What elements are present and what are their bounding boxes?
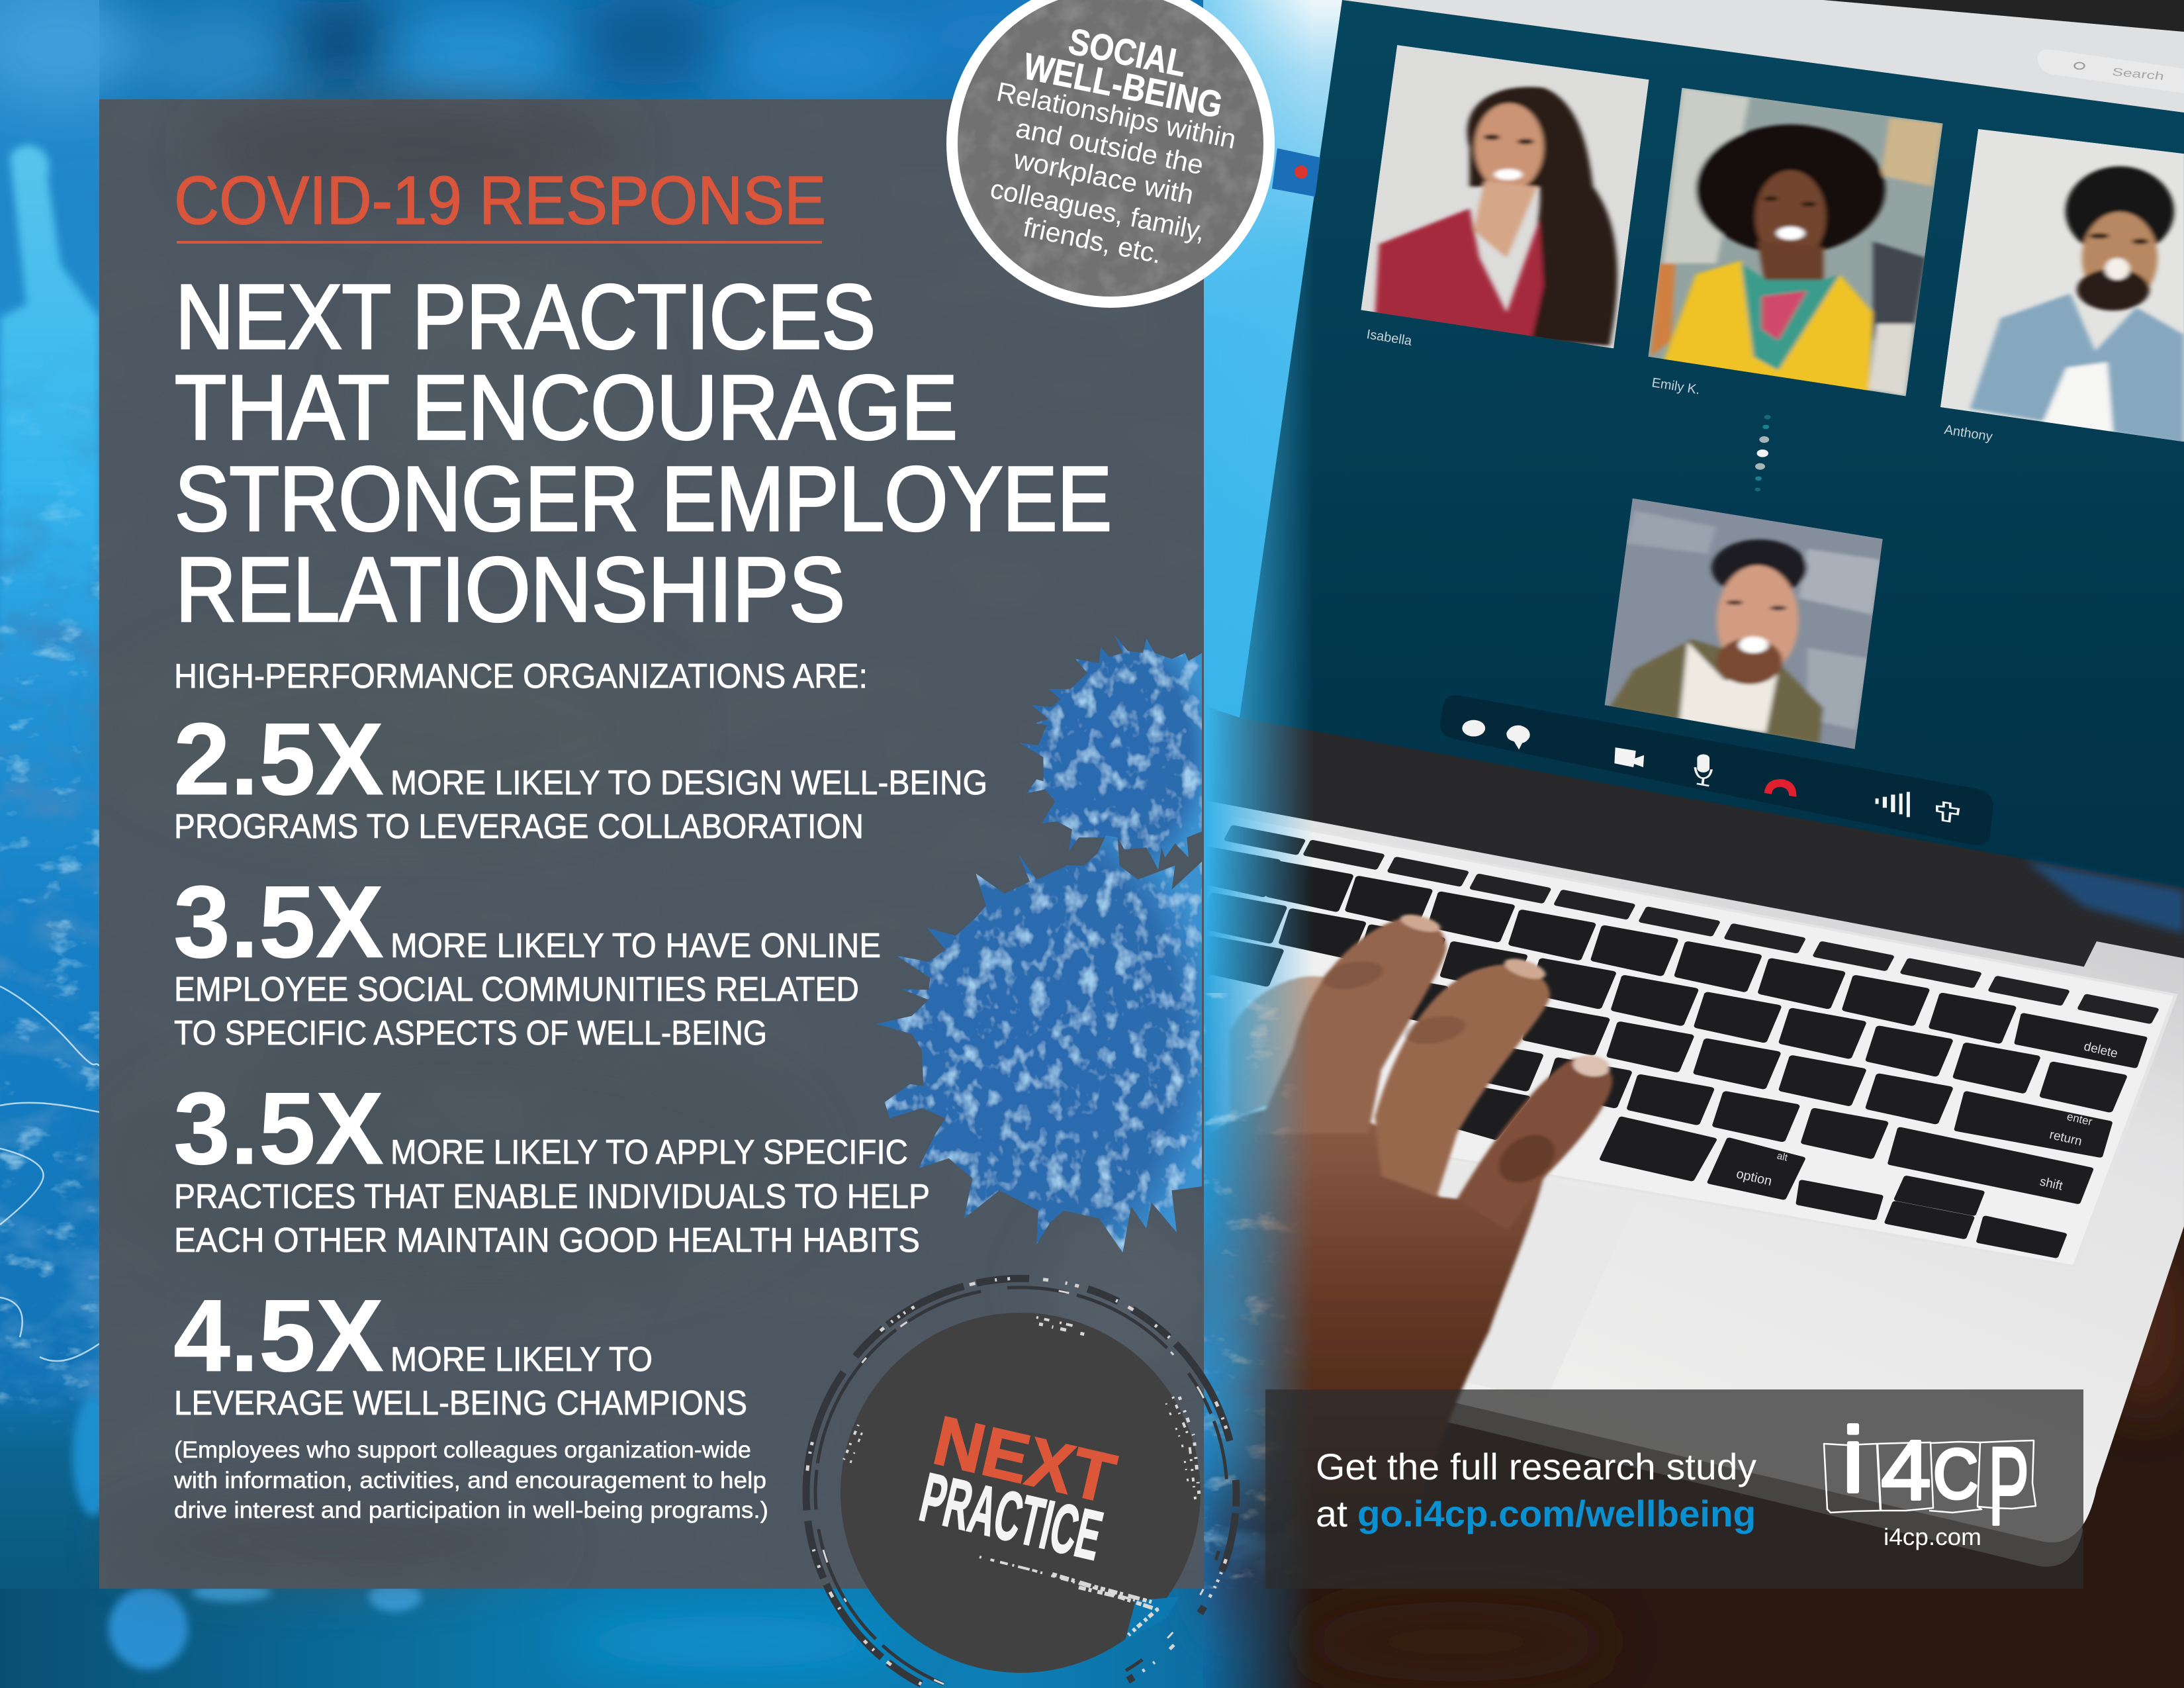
statistic: 2.5X design well-being programs: [173, 702, 987, 846]
stamp grunge edge: [844, 1317, 1199, 1635]
logo url: i4cp.com: [1884, 1523, 1981, 1550]
pale area left of screen edge: [1210, 0, 1342, 719]
search field: Search: [2111, 66, 2165, 83]
statistic: 3.5X online employee social communities: [173, 865, 881, 1053]
search field: [2038, 49, 2184, 93]
laptop bezel and hinge: [1191, 702, 2184, 1013]
blue reflection on bezel: [2025, 861, 2184, 933]
statistic: 4.5X well-being champions: 4.5X: [173, 1278, 384, 1393]
statistic: 3.5X individual health habits: PRACTICES THAT ENABLE INDIVIDUALS TO HELP: [174, 1178, 930, 1216]
statistic: 3.5X individual health habits: MORE LIKELY TO APPLY SPECIFIC: [390, 1133, 908, 1172]
logo: i4cp: 4: [1881, 1423, 1931, 1518]
panel: main text background: [99, 99, 1211, 1589]
blue notch in stamp disc: [1125, 1597, 1179, 1640]
stamp rings: [806, 1278, 1236, 1684]
call to action text: at: [1316, 1493, 1347, 1534]
icon: plus: [1937, 802, 1958, 821]
badge description: and outside the: [1013, 113, 1206, 181]
blue tab beside badge: [1272, 148, 1320, 197]
subheading: HIGH-PERFORMANCE ORGANIZATIONS ARE:: [174, 657, 868, 696]
dark corner of laptop lid: [1823, 0, 2184, 32]
statistic: 4.5X well-being champions: MORE LIKELY TO: [390, 1340, 653, 1379]
icon: red hang up: [1764, 779, 1796, 797]
badge heading: SOCIAL: [1065, 20, 1190, 85]
participant name: Isabella: Isabella: [1365, 327, 1414, 349]
photo: Emily K.: [1648, 88, 1943, 397]
stamp text: NEXT: NEXT: [927, 1401, 1122, 1518]
statistic: 3.5X online employee social communities: 3.5X: [173, 865, 384, 979]
statistic: 2.5X design well-being programs: 2.5X: [173, 702, 384, 816]
footnote text: with information, activities, and encouragement to help: [173, 1468, 766, 1493]
function key row: [1197, 827, 2156, 1256]
badge description: friends, etc.: [1021, 212, 1164, 269]
logo: i4cp: i: [1843, 1409, 1863, 1511]
call to action text: Get the full research study: [1316, 1446, 1756, 1487]
stamp text: PRACTICE: PRACTICE: [913, 1458, 1109, 1575]
video call interface: [1361, 45, 2184, 845]
logo: i4cp: P: [1988, 1424, 2029, 1548]
panel: call to action: [1265, 1389, 2083, 1589]
call to action text: go.i4cp.com/wellbeing: [1357, 1493, 1756, 1534]
silver body: [1191, 798, 2184, 1542]
virus ball: large: [876, 831, 1202, 1252]
footnote text: drive interest and participation in well-being programs.): [174, 1497, 768, 1523]
logo: i4cp: C: [1933, 1435, 1978, 1513]
photo: Isabella: [1361, 45, 1649, 348]
wooden desk: [1211, 719, 2184, 1688]
badge description: [988, 76, 1239, 269]
title: STRONGER EMPLOYEE: [175, 448, 1112, 550]
key label: shift: shift: [2038, 1174, 2064, 1194]
icon: microphone: [1695, 755, 1711, 786]
icon: video camera: [1614, 747, 1644, 767]
key label: alt: alt: [1776, 1150, 1789, 1164]
badge description: Relationships within: [994, 76, 1239, 155]
badge description: workplace with: [1011, 144, 1197, 210]
participant name: Emily K.: Emily K.: [1651, 375, 1701, 397]
key label: delete: delete: [2083, 1040, 2119, 1061]
heading: COVID-19 Response: COVID-19 RESPONSE: [174, 162, 826, 238]
badge: social well-being: [946, 0, 1275, 308]
title: [175, 266, 1112, 641]
statistic: 2.5X design well-being programs: MORE LIKELY TO DESIGN WELL-BEING: [390, 764, 987, 802]
badge heading: WELL-BEING: [1020, 45, 1226, 126]
footnote text: (Employees who support colleagues organization-wide: [174, 1437, 751, 1463]
pagination dots: [1754, 415, 1771, 491]
statistic: 3.5X online employee social communities: TO SPECIFIC ASPECTS OF WELL-BEING: [174, 1014, 767, 1053]
participant name: Anthony: Anthony: [1943, 422, 1993, 444]
statistic: 4.5X well-being champions: [173, 1278, 747, 1423]
title: RELATIONSHIPS: [175, 539, 845, 641]
trackpad: [1406, 1159, 1637, 1399]
video call screen: [1240, 0, 2184, 888]
stamp: next practice: [806, 1278, 1236, 1684]
title: NEXT PRACTICES: [175, 266, 876, 368]
photo: Anthony: [1940, 129, 2184, 444]
laptop photo: [1191, 0, 2184, 1688]
screen top bezel: [1342, 0, 2184, 122]
statistic: 4.5X well-being champions: LEVERAGE WELL-BEING CHAMPIONS: [174, 1384, 747, 1423]
call to action text: [1316, 1446, 1756, 1534]
key label: option: option: [1735, 1166, 1773, 1189]
icon: chat bubble: [1506, 726, 1530, 749]
badge heading: [1020, 20, 1226, 126]
stamp disc: [841, 1313, 1201, 1673]
photo: fourth participant: [1604, 498, 1883, 749]
statistic: 3.5X online employee social communities: MORE LIKELY TO HAVE ONLINE: [390, 927, 881, 965]
call toolbar: [1440, 695, 1993, 845]
background: blue virus image: [0, 0, 1305, 1688]
statistic: 2.5X design well-being programs: PROGRAMS TO LEVERAGE COLLABORATION: [174, 808, 864, 846]
virus ball: small: [1020, 635, 1202, 870]
key label: enter: enter: [2066, 1110, 2094, 1128]
laptop underside edge: [1441, 1362, 2083, 1567]
statistic: 3.5X individual health habits: [173, 1071, 930, 1260]
statistic: 3.5X individual health habits: EACH OTHER MAINTAIN GOOD HEALTH HABITS: [174, 1221, 920, 1260]
logo: i4cp: [1824, 1409, 2036, 1550]
badge description: colleagues, family,: [988, 173, 1208, 247]
hand on keyboard: [1191, 911, 1615, 1522]
laptop keyboard deck: [1191, 798, 2184, 1567]
footnote text: [173, 1437, 768, 1523]
statistic: 3.5X online employee social communities: EMPLOYEE SOCIAL COMMUNITIES RELATED: [174, 970, 859, 1009]
statistic: 3.5X individual health habits: 3.5X: [173, 1071, 384, 1186]
virus spike on left edge: [0, 146, 99, 702]
icon: back bubble: [1462, 720, 1485, 737]
title: THAT ENCOURAGE: [175, 357, 958, 459]
white keyboard well: [1229, 815, 2176, 1266]
icon: signal bars: [1876, 792, 1910, 817]
key label: return: return: [2048, 1128, 2083, 1149]
